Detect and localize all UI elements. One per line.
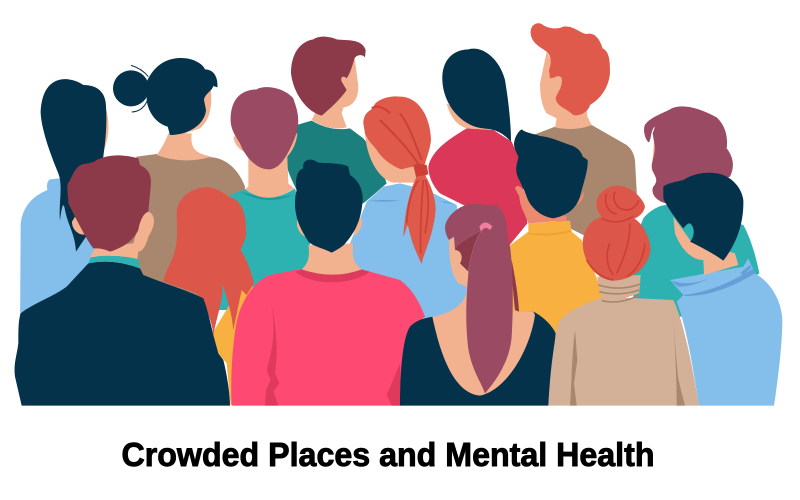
person: woman in beige coat with red hair bun — [548, 186, 699, 406]
person: man with orange hair, brown top — [531, 23, 637, 243]
person: woman with curly purple hair, teal top — [633, 106, 759, 317]
person: man with maroon hair, dark teal top — [286, 37, 387, 203]
person: man with dark hair, yellow shirt — [508, 129, 607, 343]
person: man with purple hair, teal top — [217, 87, 310, 310]
person: man in pink sweater with dark hair — [231, 160, 425, 406]
person: woman in navy dress with purple ponytail — [400, 204, 556, 406]
person: woman with hair bun, tan top — [100, 58, 245, 310]
person: woman with dark ponytail, light blue top — [20, 79, 110, 343]
person: woman with long dark hair, crimson top — [428, 49, 527, 247]
person: man in light blue hoodie with dark hair — [663, 173, 782, 406]
person: man in navy suit with maroon hair — [15, 155, 230, 406]
person: woman with long orange hair, yellow top — [163, 187, 267, 406]
person: woman with red ponytail, light blue top — [350, 96, 468, 330]
title: Crowded Places and Mental Health — [122, 436, 654, 473]
